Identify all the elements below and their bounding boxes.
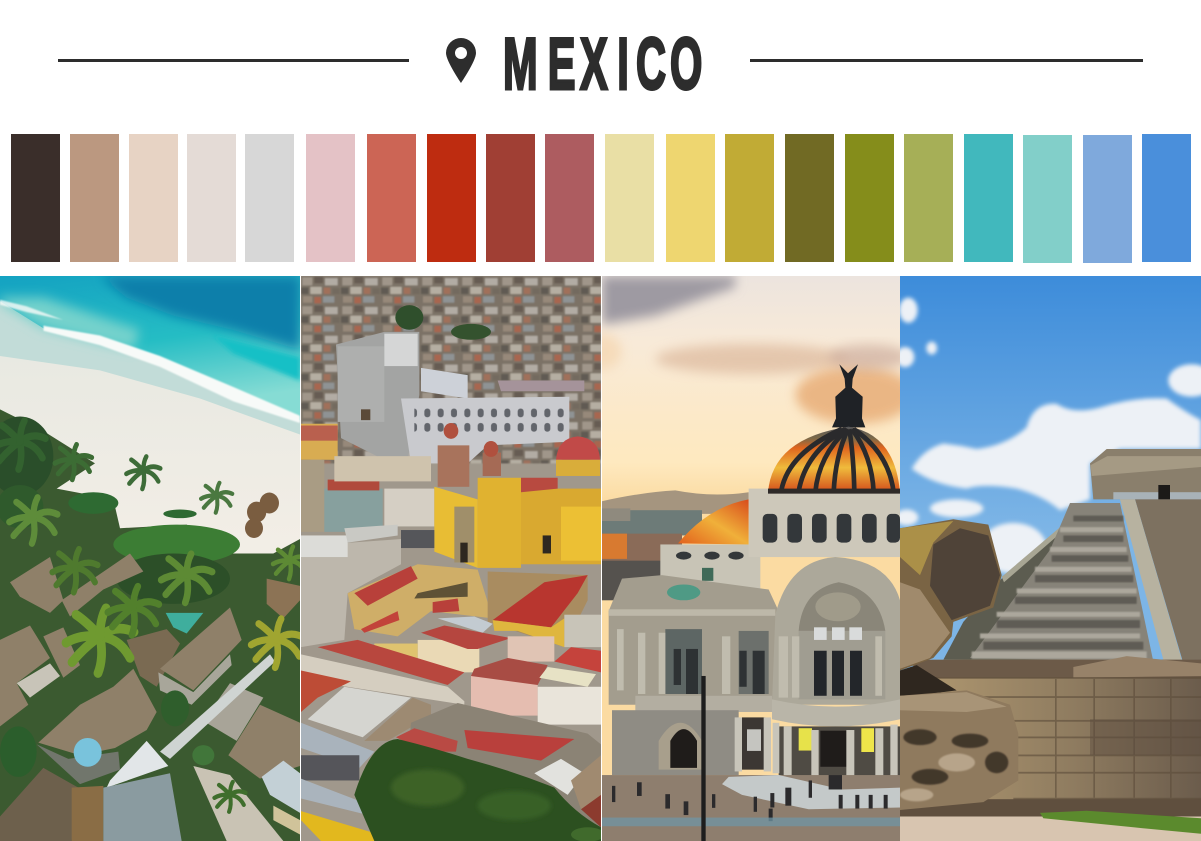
yellow railing	[301, 811, 374, 841]
red and yellow block	[348, 564, 493, 636]
upper storey	[660, 544, 760, 589]
stone wall	[913, 660, 1201, 816]
upper rock	[900, 519, 1002, 671]
main dome	[768, 427, 900, 493]
left houses	[301, 424, 338, 460]
surf line	[0, 300, 300, 423]
title: MEXICO	[503, 23, 702, 105]
pool	[166, 613, 203, 633]
university	[421, 368, 468, 399]
sunset clouds	[602, 276, 735, 325]
long red roof	[301, 654, 464, 705]
tree	[354, 739, 601, 841]
photo: Guanajuato city view	[301, 276, 604, 841]
temple top	[1090, 449, 1201, 499]
lamp post	[701, 676, 706, 841]
small orange dome	[678, 499, 749, 544]
lower rock	[900, 690, 1018, 810]
balcony	[635, 696, 772, 712]
mid-left white roofs	[301, 539, 401, 647]
jungle canopy	[0, 417, 240, 604]
people	[612, 775, 888, 821]
glass railing	[602, 818, 900, 826]
photo: Chichen Itza pyramid	[895, 276, 1201, 841]
cathedral	[336, 332, 419, 460]
pyramid right face	[1135, 499, 1201, 663]
colour palette swatches	[11, 134, 1191, 263]
drum	[749, 489, 900, 557]
buildings	[158, 654, 232, 705]
right houses	[554, 647, 601, 672]
thatched roofs	[0, 553, 300, 841]
clouds	[895, 298, 1201, 573]
pyramid steps	[972, 516, 1147, 659]
ground	[900, 816, 1201, 841]
yellow church	[521, 489, 601, 564]
plaza	[602, 775, 900, 841]
lower left roofs	[301, 671, 351, 712]
photo: Palacio de Bellas Artes at sunset	[582, 276, 915, 841]
photo: tropical beach aerial	[0, 276, 307, 841]
dirt path	[127, 629, 180, 687]
hills and skyline	[602, 490, 749, 514]
main facade	[609, 575, 779, 705]
central lower roofs	[410, 703, 601, 827]
statue finial	[832, 364, 865, 427]
pyramid	[943, 507, 1133, 662]
beach umbrellas	[245, 493, 279, 538]
icon: map pin	[446, 38, 476, 83]
palm trees	[0, 421, 307, 812]
header rule right	[750, 59, 1143, 62]
rock stem	[900, 665, 957, 698]
ground floor	[612, 710, 739, 775]
header rule left	[58, 59, 409, 62]
